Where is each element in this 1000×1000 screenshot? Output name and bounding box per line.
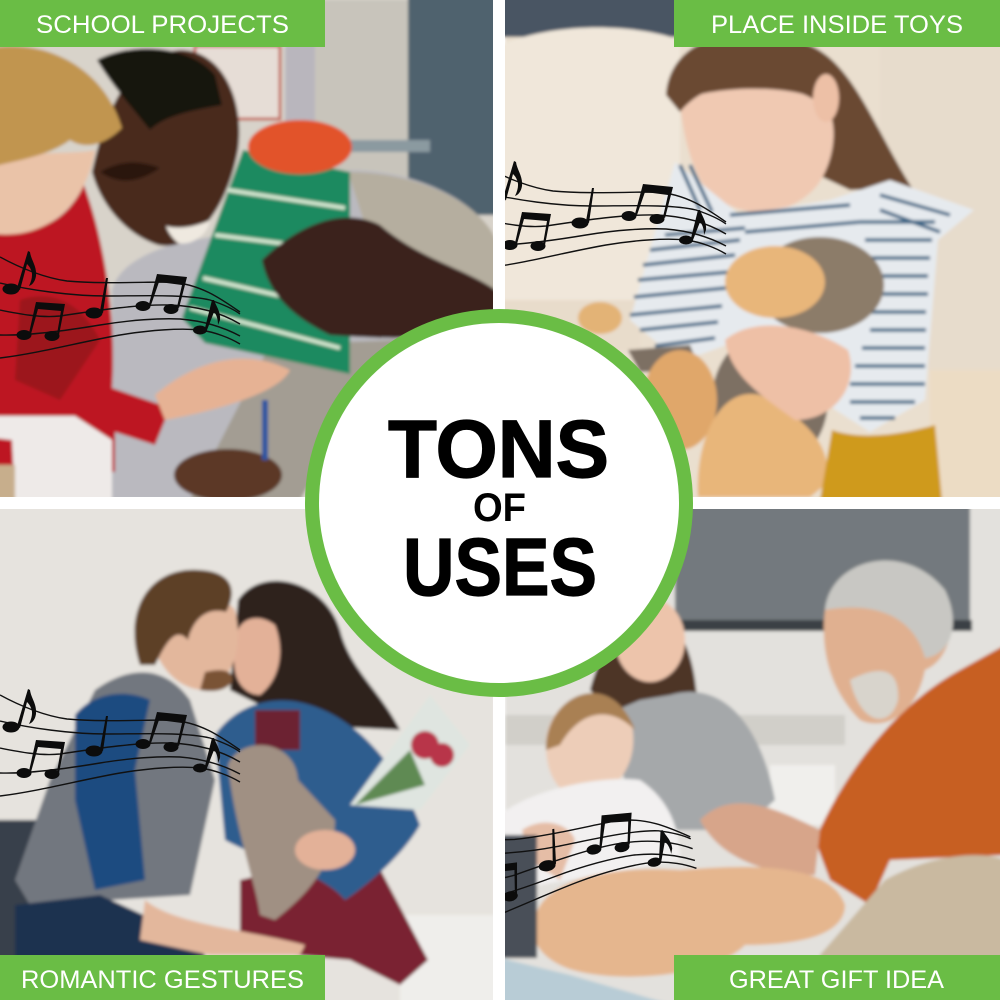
title: of: OF xyxy=(473,486,526,530)
blanket xyxy=(500,958,673,1000)
man's sweater xyxy=(815,645,1000,905)
tissue roll xyxy=(0,416,112,500)
man's trousers xyxy=(14,894,207,955)
woman's face xyxy=(234,618,280,695)
girl's hand xyxy=(725,326,851,420)
panel: romantic gestures photo xyxy=(0,505,498,1000)
woman's hand xyxy=(295,830,355,870)
girl's face xyxy=(680,89,834,212)
music notes xyxy=(486,161,726,268)
woman's top xyxy=(605,692,775,830)
man's shirt xyxy=(75,694,150,890)
bouquet xyxy=(348,758,415,812)
label: great gift idea: GREAT GIFT IDEA xyxy=(729,966,944,994)
baby xyxy=(545,713,636,788)
monkey toy xyxy=(756,237,884,333)
green cup xyxy=(182,150,350,374)
label: great gift idea xyxy=(674,955,1000,1000)
brown object xyxy=(174,449,282,501)
music notes xyxy=(0,689,240,796)
woman's hair xyxy=(588,643,698,710)
panel: school projects photo xyxy=(0,0,498,501)
title: uses: USES xyxy=(403,522,597,613)
center circle badge with title xyxy=(312,316,686,690)
striped shirt xyxy=(630,162,974,432)
panel: place inside toys photo xyxy=(486,0,1000,500)
label: school projects: SCHOOL PROJECTS xyxy=(36,11,289,39)
man's head xyxy=(820,606,948,725)
man's head xyxy=(156,604,240,691)
sloth toy xyxy=(228,745,335,920)
man's vest xyxy=(15,672,215,905)
woman's dress xyxy=(238,870,430,986)
man's t-shirt xyxy=(112,170,498,500)
man's head xyxy=(92,50,239,246)
label: romantic gestures: ROMANTIC GESTURES xyxy=(21,966,304,994)
red sweater xyxy=(0,185,170,472)
man's hands xyxy=(700,803,820,875)
music notes xyxy=(443,777,699,928)
man's hand xyxy=(262,218,498,338)
woman's face xyxy=(615,598,685,682)
label: place inside toys: PLACE INSIDE TOYS xyxy=(711,11,963,39)
label: place inside toys xyxy=(674,0,1000,47)
teddy bear xyxy=(534,867,845,977)
title: tons: TONS xyxy=(388,404,609,495)
boy's arm and hand xyxy=(155,359,290,420)
label: romantic gestures xyxy=(0,955,325,1000)
label: school projects xyxy=(0,0,325,47)
woman's denim jacket xyxy=(215,700,420,900)
girl's hair xyxy=(666,34,912,190)
boy's head xyxy=(0,150,95,235)
woman's hair xyxy=(230,581,400,730)
panel: great gift idea photo xyxy=(505,509,1000,1000)
man's trousers xyxy=(820,855,1000,960)
yellow skirt xyxy=(820,425,942,500)
music notes xyxy=(0,251,240,358)
